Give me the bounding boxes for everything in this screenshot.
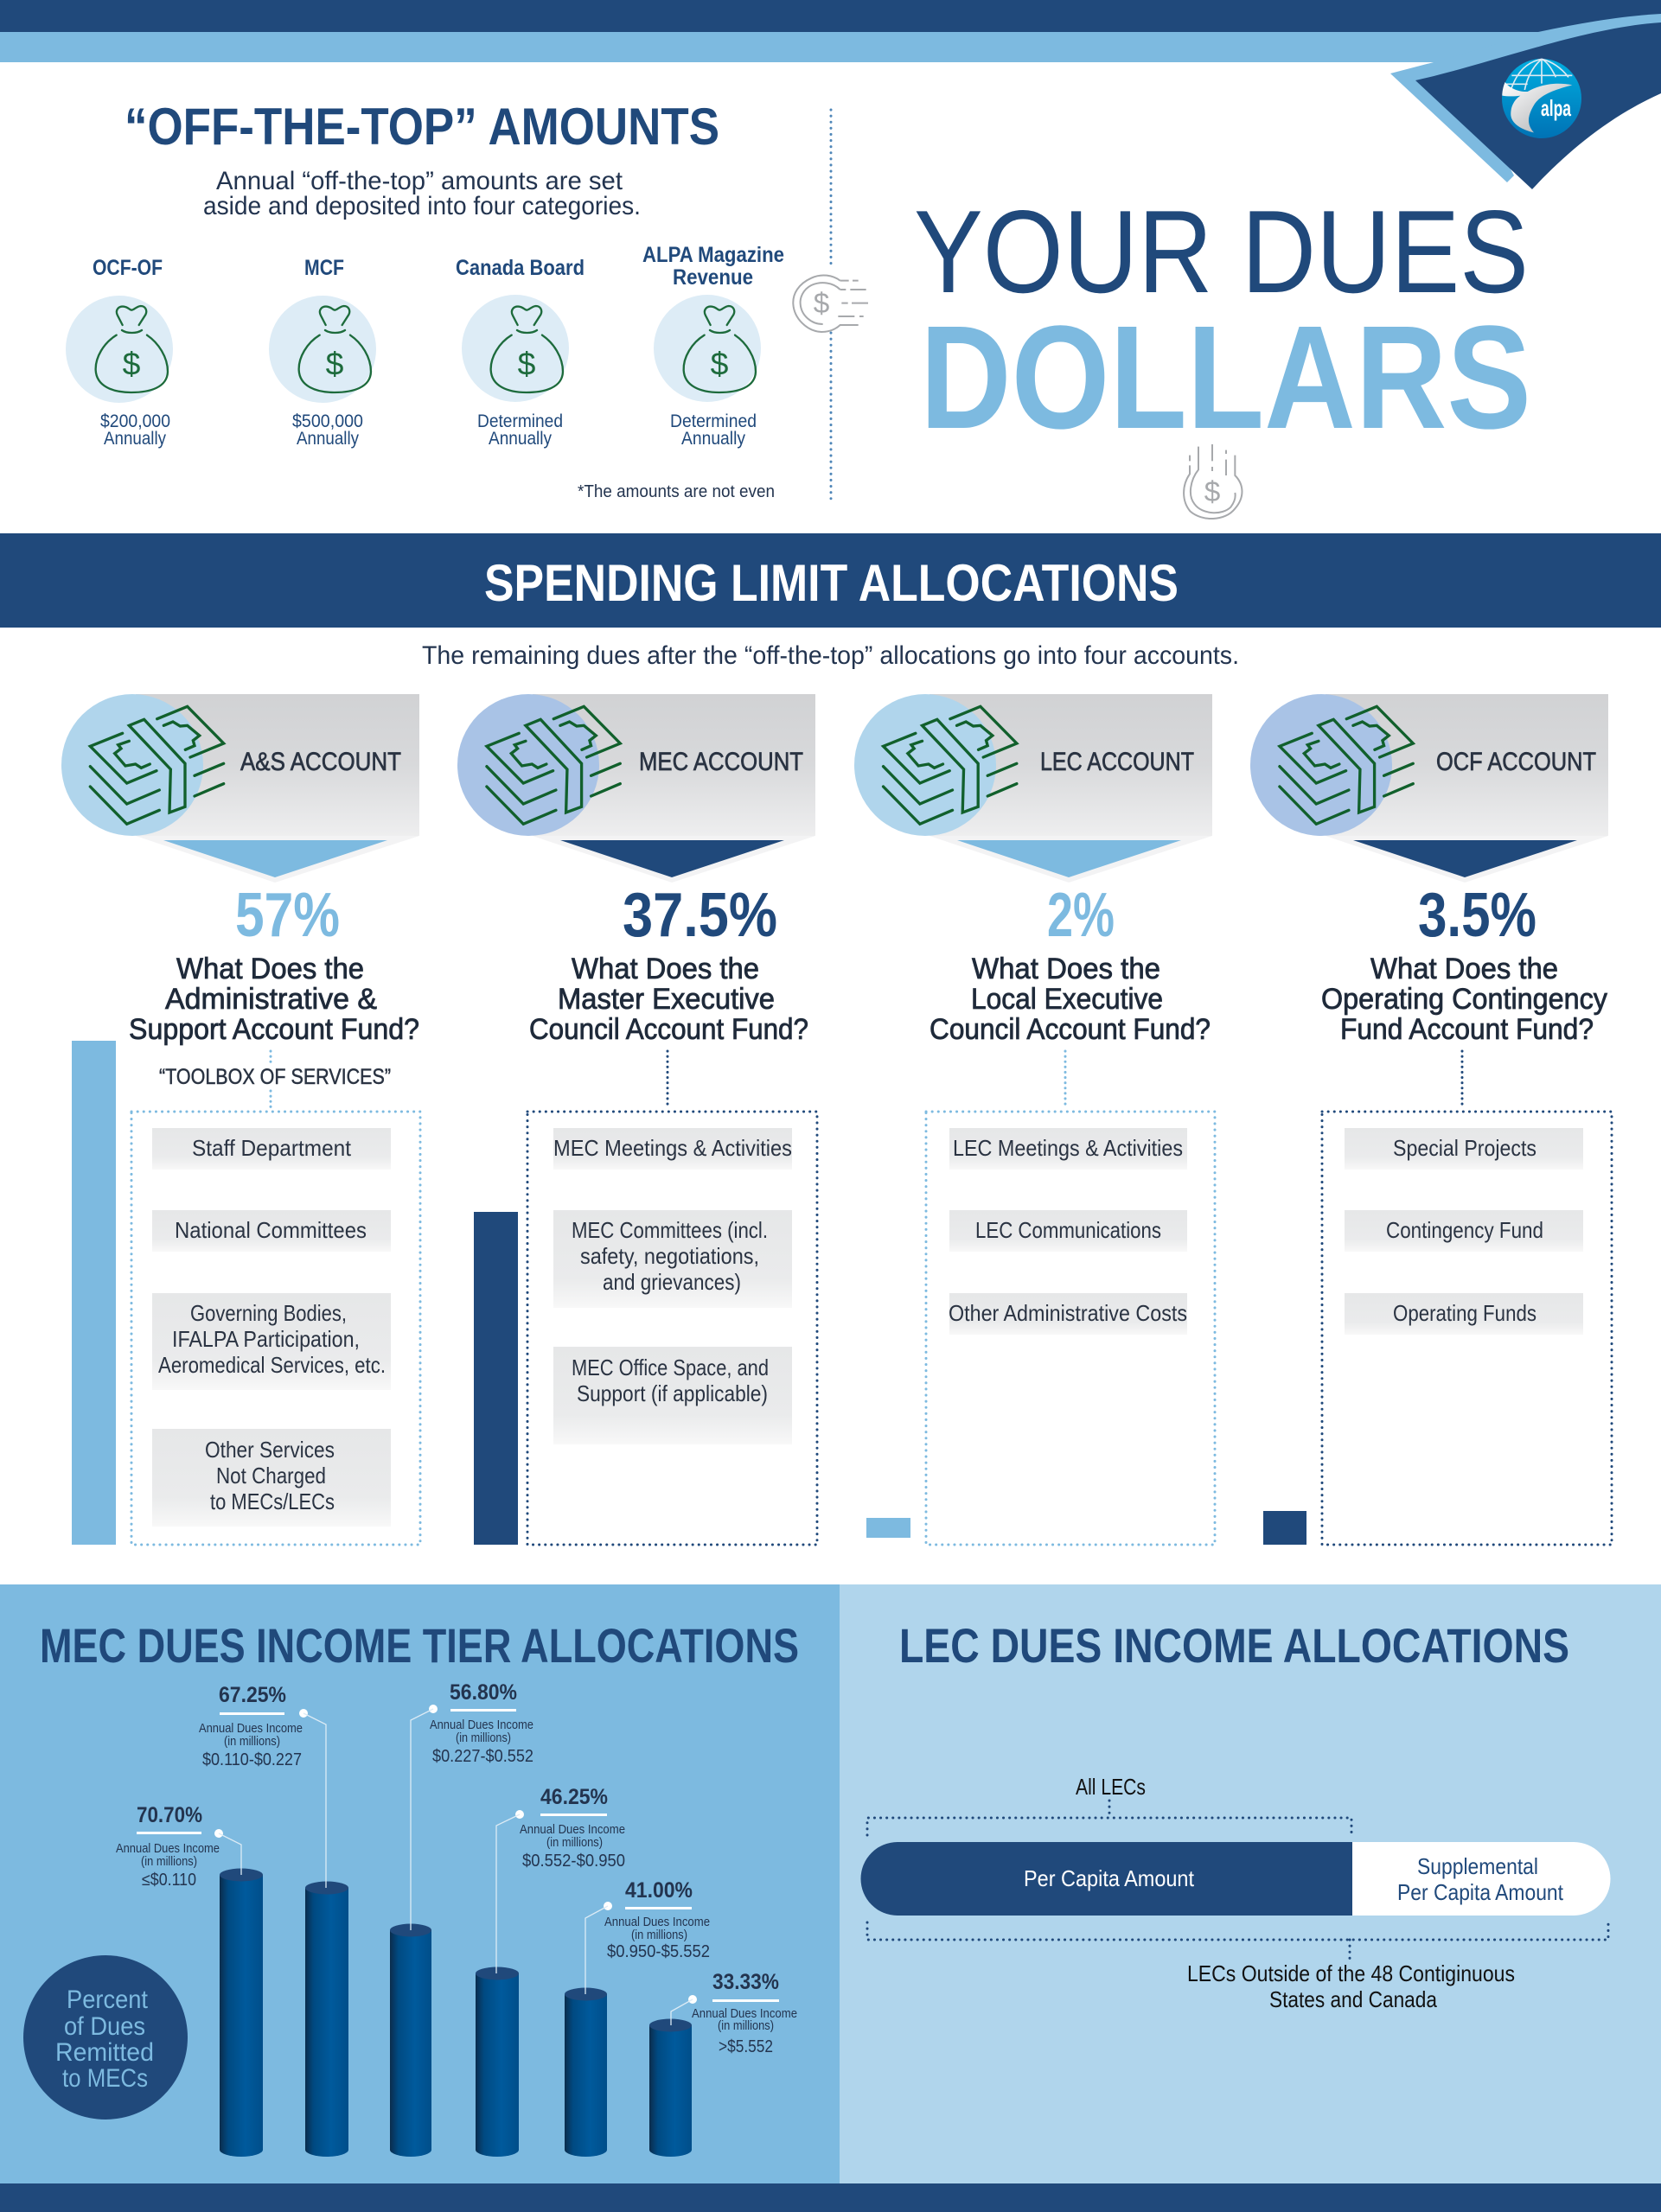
badge: percent of dues remitted to MECs: of Dues xyxy=(64,2012,145,2041)
bar: 2% xyxy=(866,1518,910,1538)
list: A&S services: Aeromedical Services, etc. xyxy=(158,1352,386,1378)
account header: OCF: OCF ACCOUNT xyxy=(1436,748,1596,776)
question: OCF xyxy=(1321,953,1607,1046)
account header: MEC xyxy=(457,694,815,883)
callout: 70.70%: ≤$0.110 xyxy=(142,1871,196,1890)
callout: 56.80%: 56.80% xyxy=(450,1680,517,1705)
heading: off-the-top amounts: “OFF-THE-TOP” AMOUNTS xyxy=(125,98,719,156)
label: LECs outside xyxy=(1187,1960,1515,2012)
list: LEC items: LEC Meetings & Activities xyxy=(953,1135,1183,1161)
callout: 46.25%: 46.25% xyxy=(540,1785,608,1809)
title: your dues dollars: DOLLARS xyxy=(920,296,1531,460)
icon: moving coin: $ xyxy=(814,288,829,320)
list: A&S services: Other Services xyxy=(205,1437,335,1463)
list: MEC items: MEC Office Space, and xyxy=(572,1355,769,1380)
icon: ALPA logo xyxy=(1502,59,1581,138)
percentage: 3.5%: 3.5% xyxy=(1418,881,1536,950)
list: A&S services xyxy=(131,1112,420,1545)
list: LEC items: Other Administrative Costs xyxy=(949,1300,1187,1326)
list: MEC items xyxy=(527,1112,817,1545)
callout: 46.25%: Annual Dues Income xyxy=(520,1822,625,1837)
bar: 57% xyxy=(72,1041,116,1545)
list: A&S services: Governing Bodies, xyxy=(190,1300,347,1326)
callout: 41.00%: $0.950-$5.552 xyxy=(607,1942,710,1961)
label: LECs outside: LECs Outside of the 48 Contiginuous xyxy=(1187,1960,1515,1986)
list: MEC items: MEC Committees (incl. xyxy=(572,1217,768,1243)
question: LEC: What Does the xyxy=(972,953,1160,985)
question: MEC xyxy=(529,953,808,1046)
callout: 33.33% xyxy=(671,1970,797,2056)
intro text xyxy=(203,167,641,220)
list: A&S services: IFALPA Participation, xyxy=(172,1326,360,1352)
list: A&S services: Not Charged xyxy=(216,1463,326,1488)
callout: 46.25% xyxy=(496,1785,625,1973)
account header: MEC: MEC ACCOUNT xyxy=(639,748,803,776)
percentage: 37.5%: 37.5% xyxy=(623,881,777,950)
pill: per capita amounts xyxy=(861,1842,1611,1916)
category: OCF-OF: Annually xyxy=(104,429,166,449)
callout: 70.70%: (in millions) xyxy=(141,1854,197,1869)
icon: falling coin: $ xyxy=(1204,476,1220,508)
icon: moving coin xyxy=(793,275,868,332)
panel: LEC dues income allocations xyxy=(840,1584,1661,2183)
category: OCF-OF: OCF-OF xyxy=(93,256,163,280)
list: MEC items: safety, negotiations, xyxy=(580,1243,759,1269)
callout: 70.70% xyxy=(116,1803,241,1890)
callout: 70.70%: 70.70% xyxy=(137,1803,202,1827)
badge: percent of dues remitted to MECs: Remitted xyxy=(55,2038,154,2067)
category: ALPA Magazine Revenue: Revenue xyxy=(673,265,753,290)
list: LEC items xyxy=(926,1112,1215,1545)
question: A&S xyxy=(129,953,419,1046)
account header: LEC: LEC ACCOUNT xyxy=(1040,748,1194,776)
question: A&S: Administrative & xyxy=(165,983,377,1016)
panel: off-the-top amounts xyxy=(66,98,784,501)
category: Canada Board: $ xyxy=(518,345,536,381)
account header: LEC xyxy=(854,694,1212,883)
list: LEC items: LEC Communications xyxy=(975,1217,1161,1243)
panel: MEC account xyxy=(457,694,817,1545)
callout: 46.25%: $0.552-$0.950 xyxy=(522,1852,625,1871)
category: ALPA Magazine Revenue: $ xyxy=(711,345,729,381)
callout: 41.00%: Annual Dues Income xyxy=(604,1915,710,1929)
footnote: *The amounts are not even xyxy=(578,482,775,501)
category: MCF: $500,000 xyxy=(292,411,363,431)
category: ALPA Magazine Revenue: Annually xyxy=(681,429,745,449)
list: OCF items: Contingency Fund xyxy=(1386,1217,1543,1243)
account header: A&S xyxy=(61,694,419,883)
callout: 67.25%: 67.25% xyxy=(219,1683,286,1707)
category: Canada Board: Canada Board xyxy=(456,256,585,280)
percentage: 57%: 57% xyxy=(235,881,340,950)
callout: 56.80%: Annual Dues Income xyxy=(430,1718,533,1732)
question: LEC: Council Account Fund? xyxy=(930,1013,1211,1046)
pill: per capita amounts: Supplemental xyxy=(1417,1853,1538,1879)
callout: 41.00%: 41.00% xyxy=(625,1878,693,1903)
badge: percent of dues remitted to MECs: to MECs xyxy=(62,2064,148,2093)
account header: A&S: A&S ACCOUNT xyxy=(240,748,401,776)
callout: 33.33%: (in millions) xyxy=(718,2018,774,2033)
callout: 56.80%: $0.227-$0.552 xyxy=(432,1747,533,1766)
label: LECs outside: States and Canada xyxy=(1269,1986,1437,2012)
category: Canada Board: Determined xyxy=(477,411,563,431)
callout: 46.25%: (in millions) xyxy=(546,1835,603,1850)
category: Canada Board: Annually xyxy=(489,429,552,449)
panel: LEC account xyxy=(854,694,1215,1545)
heading: MEC dues income: MEC DUES INCOME TIER ALLOCATIONS xyxy=(40,1618,799,1673)
list: A&S services: to MECs/LECs xyxy=(210,1488,335,1514)
callout: 33.33%: 33.33% xyxy=(712,1970,779,1994)
question: LEC: Local Executive xyxy=(971,983,1163,1016)
panel: A&S account xyxy=(61,694,420,1545)
list: OCF items: Special Projects xyxy=(1393,1135,1536,1161)
question: OCF: What Does the xyxy=(1370,953,1558,985)
category: MCF: MCF xyxy=(304,256,344,280)
question: MEC: What Does the xyxy=(572,953,759,985)
callout: 67.25% xyxy=(199,1683,326,1888)
badge: percent of dues remitted to MECs xyxy=(23,1955,188,2120)
category: OCF-OF xyxy=(66,256,173,449)
category: OCF-OF: $200,000 xyxy=(100,411,170,431)
category: MCF: Annually xyxy=(297,429,359,449)
question: OCF: Fund Account Fund? xyxy=(1340,1013,1594,1046)
icon: falling coin xyxy=(1184,444,1242,519)
account header: OCF xyxy=(1250,694,1608,883)
callout: 67.25%: Annual Dues Income xyxy=(199,1721,303,1736)
list: MEC items: MEC Meetings & Activities xyxy=(553,1135,792,1161)
category: ALPA Magazine Revenue: ALPA Magazine xyxy=(642,243,784,267)
bar: 37.5% xyxy=(474,1212,518,1545)
category: MCF: $ xyxy=(326,345,344,381)
list: MEC items: and grievances) xyxy=(603,1269,741,1295)
panel: MEC dues income tier allocations xyxy=(0,1584,840,2183)
bar: 3.5% xyxy=(1263,1511,1306,1545)
list: OCF items: Operating Funds xyxy=(1393,1300,1536,1326)
footer band xyxy=(0,2183,1661,2212)
question: A&S: What Does the xyxy=(176,953,364,985)
category: ALPA Magazine Revenue xyxy=(642,243,784,449)
list: A&S services: Staff Department xyxy=(192,1135,352,1161)
callout: 41.00% xyxy=(585,1878,710,1994)
bracket: all LECs xyxy=(867,1801,1351,1835)
category: MCF xyxy=(269,256,376,449)
callout: 41.00%: (in millions) xyxy=(631,1928,687,1942)
chart: cylinder bars xyxy=(220,1869,692,2157)
section banner: spending limit allocations: SPENDING LIMIT ALLOCATIONS xyxy=(484,554,1179,612)
section banner: spending limit allocations xyxy=(0,533,1661,628)
pill: per capita amounts: Per Capita Amount xyxy=(1397,1879,1564,1905)
title: your dues dollars xyxy=(914,186,1531,460)
bracket: outside LECs xyxy=(867,1922,1608,1960)
category: Canada Board xyxy=(456,256,585,449)
category: ALPA Magazine Revenue: Determined xyxy=(670,411,757,431)
question: LEC xyxy=(930,953,1211,1046)
callout: 67.25%: $0.110-$0.227 xyxy=(202,1750,302,1769)
list: MEC items: Support (if applicable) xyxy=(577,1380,768,1406)
question: A&S: Support Account Fund? xyxy=(129,1013,419,1046)
callout: 56.80% xyxy=(411,1680,533,1930)
label: toolbox of services: “TOOLBOX OF SERVICES” xyxy=(159,1065,391,1089)
question: MEC: Master Executive xyxy=(558,983,775,1016)
intro text: Annual “off-the-top” amounts are set xyxy=(216,167,623,195)
top header bands xyxy=(0,0,1661,62)
badge: percent of dues remitted to MECs: Percent xyxy=(67,1986,149,2014)
callout: 33.33%: Annual Dues Income xyxy=(692,2006,797,2021)
category: OCF-OF: $ xyxy=(123,345,141,381)
callout: 70.70%: Annual Dues Income xyxy=(116,1841,220,1856)
list: OCF items xyxy=(1322,1112,1612,1545)
question: OCF: Operating Contingency xyxy=(1321,983,1607,1016)
callout: 67.25%: (in millions) xyxy=(224,1734,280,1749)
percentage: 2%: 2% xyxy=(1047,881,1115,950)
question: MEC: Council Account Fund? xyxy=(529,1013,808,1046)
intro text: aside and deposited into four categories. xyxy=(203,192,641,220)
swoosh banner xyxy=(1390,14,1661,189)
label: all LECs: All LECs xyxy=(1076,1774,1146,1800)
icon: ALPA logo: alpa xyxy=(1541,95,1571,121)
intro: remaining dues: The remaining dues after the “off-the-top” allocations go into four accounts. xyxy=(422,641,1239,670)
callout: 33.33%: >$5.552 xyxy=(719,2037,773,2056)
callout: 56.80%: (in millions) xyxy=(456,1731,511,1745)
list: A&S services: National Committees xyxy=(175,1217,367,1243)
pill: per capita amounts: Per Capita Amount xyxy=(1024,1865,1195,1891)
title: your dues dollars: YOUR DUES xyxy=(914,186,1529,317)
panel: OCF account xyxy=(1250,694,1612,1545)
